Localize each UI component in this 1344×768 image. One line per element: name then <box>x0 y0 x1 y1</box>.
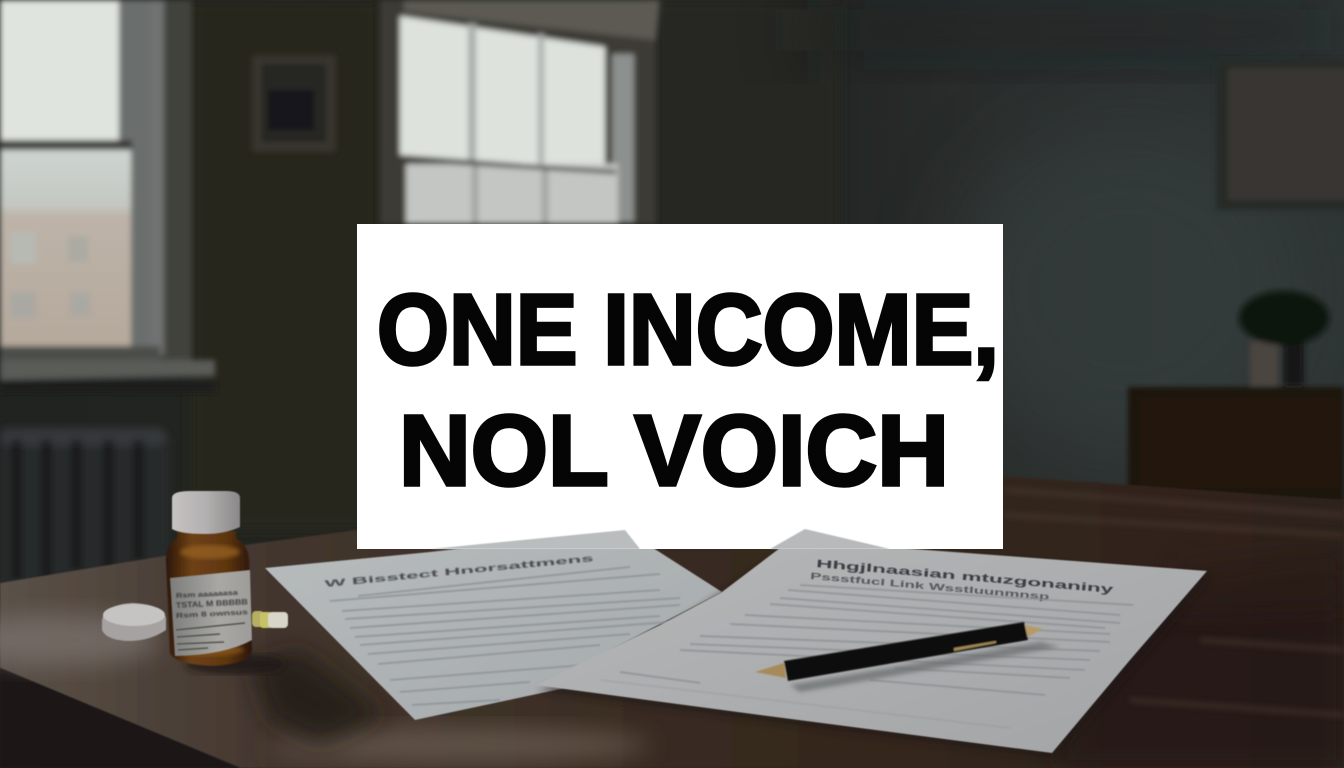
left wall picture frame <box>252 55 336 152</box>
paper right <box>535 529 1210 759</box>
label text: TSTAL M BBBBB <box>176 597 248 610</box>
paper left heading: W Bisstect Hnorsattmens <box>324 553 594 590</box>
bottle lid <box>102 603 166 641</box>
paper right subheading: Pssstfucl Link Wsstluunmnsp <box>810 571 1051 602</box>
title card <box>357 224 1003 549</box>
title line two: NOL VOICH <box>399 395 949 507</box>
title line one: ONE INCOME, <box>377 274 999 386</box>
sideboard <box>1128 387 1344 502</box>
paper left body lines <box>330 567 680 705</box>
label text: Rsm 8 ownsus <box>176 609 248 620</box>
label text: Rsm aaaaaasa <box>176 590 238 600</box>
paper right heading: Hhgjlnaasian mtuzgonaniny <box>816 558 1115 596</box>
upper pane <box>0 0 119 140</box>
amber glass <box>166 531 252 666</box>
paper tips over card <box>430 529 890 549</box>
radiator <box>0 428 170 586</box>
bottle label <box>170 570 252 656</box>
window sill <box>0 360 215 380</box>
capsules <box>252 611 288 628</box>
paper left <box>265 530 722 720</box>
right wall picture frame <box>1216 60 1344 210</box>
wooden table <box>0 476 1344 768</box>
paper right body lines <box>600 585 1133 728</box>
cap <box>172 491 240 534</box>
centre window <box>380 0 660 224</box>
lower pane <box>0 150 131 346</box>
medicine bottle <box>166 491 285 674</box>
bottle shadow <box>185 654 285 674</box>
pen <box>755 622 1060 692</box>
label text <box>176 590 248 620</box>
potted plant <box>1239 291 1329 386</box>
left window <box>0 0 215 392</box>
